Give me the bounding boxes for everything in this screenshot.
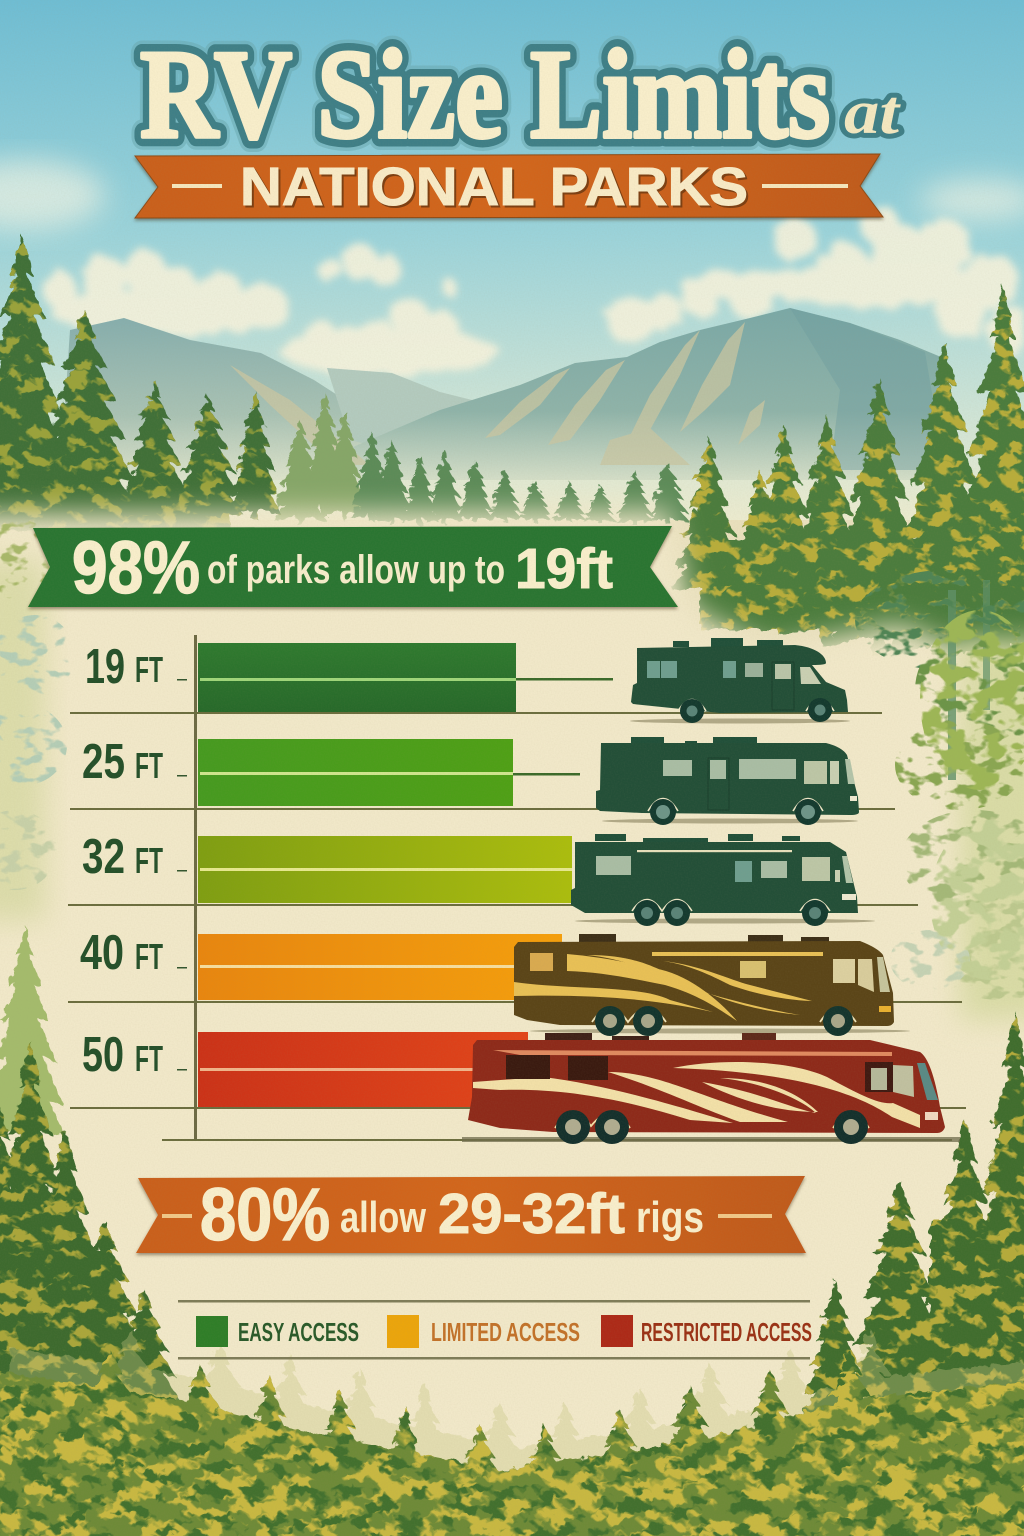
bar: 50 ft (82, 1028, 528, 1107)
pale foliage left edge (0, 520, 75, 1145)
bar: 32 ft: FT (135, 840, 163, 881)
lower right pines (801, 1010, 1024, 1450)
bottom forest (0, 1328, 1024, 1536)
ribbon: national parks (135, 154, 883, 219)
bar: 25 ft: FT (135, 745, 163, 786)
bar: 19 ft: 19 (85, 640, 125, 694)
chart axis and row lines (68, 635, 966, 1141)
orange stat banner: rigs (636, 1193, 704, 1242)
bar: 32 ft (82, 830, 572, 903)
main heading: at (844, 79, 901, 147)
clouds (0, 160, 1024, 376)
pale foliage right edge (855, 570, 1024, 1020)
orange stat banner: allow (340, 1193, 427, 1242)
icon: 50 ft luxury coach (462, 1033, 960, 1144)
main heading: RV Size Limits (140, 25, 830, 165)
main heading: RV Size Limits (140, 25, 830, 165)
sky background (0, 0, 1024, 520)
green stat banner: 19ft (515, 537, 613, 601)
orange stat banner: 29-32ft (438, 1182, 625, 1246)
icon: 40 ft luxury coach (514, 934, 910, 1036)
bar: 40 ft (80, 926, 562, 1000)
lower left pines (0, 1040, 186, 1450)
bar: 40 ft: 40 (80, 926, 124, 980)
icon: 19 ft class C motorhome (630, 638, 850, 724)
upper right pines (673, 285, 1024, 675)
main heading: at (844, 79, 901, 147)
green stat banner (28, 526, 678, 609)
orange stat banner: 80% (200, 1173, 330, 1256)
main heading: RV Size Limits (140, 25, 830, 165)
bar: 19 ft: FT (135, 649, 163, 690)
icon: 32 ft motorhome (571, 834, 875, 926)
icon: 25 ft motorhome (596, 737, 859, 825)
orange stat banner (136, 1173, 806, 1256)
green stat banner: of parks allow up to (207, 548, 505, 592)
bar: 50 ft: 50 (82, 1028, 124, 1082)
legend (178, 1300, 812, 1360)
bar: 19 ft (85, 640, 613, 712)
upper left pines (0, 235, 281, 530)
bar: 32 ft: 32 (82, 830, 125, 884)
bar: 40 ft: FT (135, 936, 163, 977)
bar: 25 ft: 25 (82, 735, 125, 789)
legend: EASY ACCESS (238, 1317, 359, 1347)
distant forest line (274, 392, 690, 525)
ribbon: national parks: NATIONAL PARKS (240, 157, 748, 217)
mountains (60, 308, 960, 480)
cream central field (0, 512, 1024, 1536)
bar: 50 ft: FT (135, 1038, 163, 1079)
legend: LIMITED ACCESS (431, 1317, 580, 1347)
green stat banner: 98% (72, 526, 200, 609)
bar: 25 ft (82, 735, 580, 806)
ribbon: national parks: NATIONAL PARKS (242, 159, 750, 219)
legend: RESTRICTED ACCESS (641, 1317, 812, 1347)
